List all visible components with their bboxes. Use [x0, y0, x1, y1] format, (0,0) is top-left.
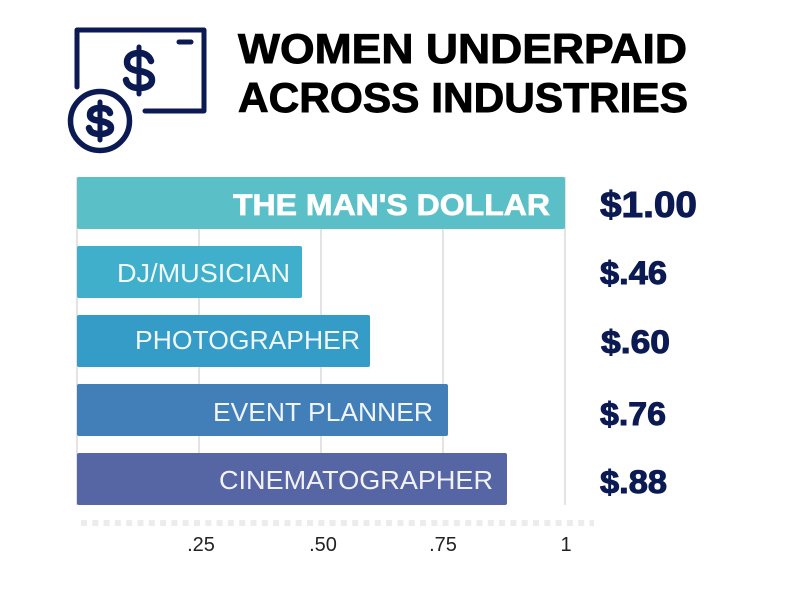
- title: ACROSS INDUSTRIES: [238, 74, 688, 121]
- values: $.76: [600, 396, 666, 432]
- bar: cinematographer: CINEMATOGRAPHER: [219, 465, 493, 495]
- chart grid lines: [77, 177, 565, 505]
- bar: event planner: EVENT PLANNER: [213, 397, 433, 427]
- values: $1.00: [600, 184, 697, 225]
- bar: event planner: [77, 384, 448, 436]
- bar: cinematographer: [77, 453, 507, 505]
- axis labels: .25: [187, 534, 215, 556]
- bar: DJ/musician: DJ/MUSICIAN: [117, 258, 290, 288]
- bar: the man's dollar: THE MAN'S DOLLAR: [233, 189, 550, 222]
- bar: photographer: PHOTOGRAPHER: [135, 325, 360, 355]
- axis labels: 1: [560, 534, 572, 556]
- values: [600, 184, 697, 500]
- title: WOMEN UNDERPAID: [238, 25, 687, 72]
- values: $.88: [600, 464, 667, 500]
- axis dotted line: [81, 520, 594, 526]
- values: $.60: [601, 324, 670, 360]
- title: [238, 25, 688, 121]
- axis labels: .50: [309, 534, 337, 556]
- values: $.46: [600, 255, 667, 291]
- axis labels: .75: [429, 534, 457, 556]
- icon: banknote and coin: [70, 30, 204, 150]
- axis labels: [187, 534, 572, 556]
- bar: the man's dollar: [77, 177, 565, 229]
- bar: DJ/musician: [77, 246, 302, 298]
- bar: photographer: [77, 315, 370, 367]
